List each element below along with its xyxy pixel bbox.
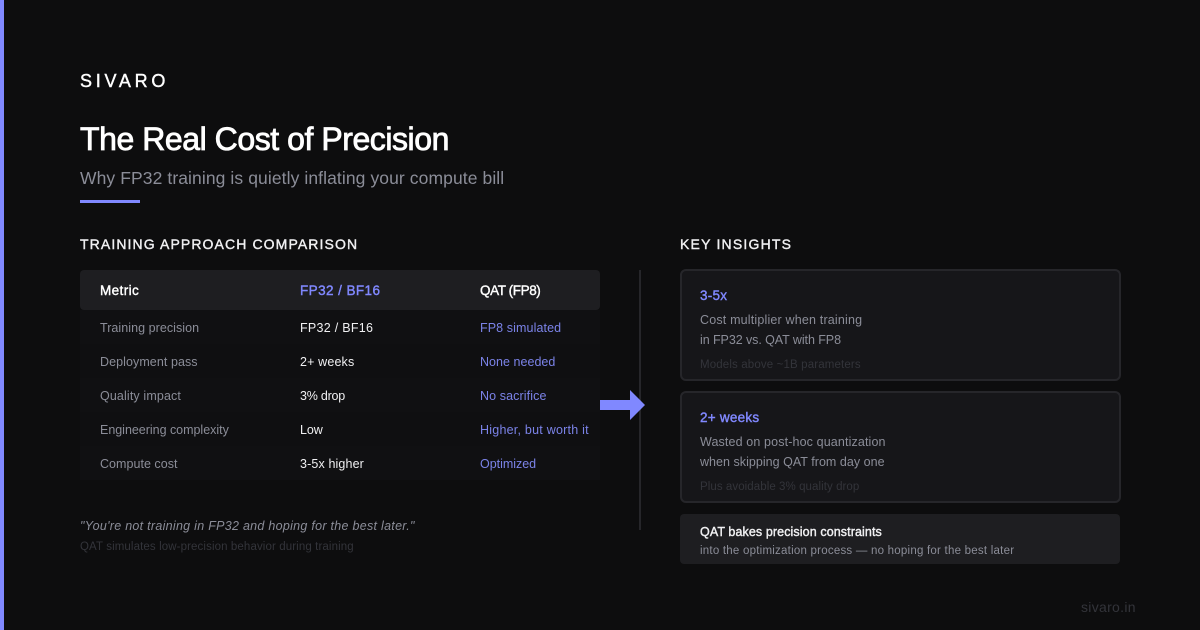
callout heading: QAT bakes precision constraints [700, 525, 882, 539]
row: deployment pass: Deployment pass [100, 355, 198, 369]
table header [80, 270, 600, 310]
quote: "You're not training in FP32 and hoping for the best later." [80, 518, 415, 532]
note: Models above ~1B parameters [700, 359, 861, 371]
header: metric: Metric [100, 283, 139, 298]
row: engineering complexity: Low [300, 423, 323, 437]
heading: comparison: TRAINING APPROACH COMPARISON [80, 236, 358, 252]
title: The Real Cost of Precision [80, 121, 449, 157]
brand logo: SIVARO [80, 71, 169, 91]
row: training precision: FP32 / BF16 [300, 321, 373, 335]
row: compute cost: Compute cost [100, 457, 177, 471]
row: compute cost: 3-5x higher [300, 457, 364, 471]
insight card: cost [680, 269, 1121, 381]
header: QAT: QAT (FP8) [480, 283, 540, 298]
row: quality impact [100, 389, 546, 403]
table body [80, 310, 600, 480]
row: engineering complexity: Higher, but worth it [480, 423, 589, 437]
callout [680, 514, 1120, 564]
row: deployment pass: None needed [480, 355, 555, 369]
row: compute cost [100, 457, 536, 471]
row: deployment pass: 2+ weeks [300, 355, 354, 369]
stat: 2+ weeks [700, 410, 759, 425]
note: Plus avoidable 3% quality drop [700, 481, 859, 493]
row: engineering complexity: Engineering complexity [100, 423, 229, 437]
row: quality impact: 3% drop [300, 389, 345, 403]
subtitle: Why FP32 training is quietly inflating your compute bill [80, 168, 504, 188]
arrow [600, 390, 645, 420]
title underline [80, 200, 140, 203]
row: quality impact: No sacrifice [480, 389, 546, 403]
heading: insights: KEY INSIGHTS [680, 236, 792, 252]
row: deployment pass [80, 344, 600, 378]
column divider [639, 270, 641, 530]
insight card: weeks [680, 391, 1121, 503]
header: FP32: FP32 / BF16 [300, 283, 380, 298]
insight card: weeks: when skipping QAT from day one [700, 455, 885, 469]
callout text: into the optimization process — no hoping for the best later [700, 545, 1014, 557]
insight card: cost: in FP32 vs. QAT with FP8 [700, 333, 841, 347]
row: engineering complexity [80, 412, 600, 446]
description: Wasted on post-hoc quantization [700, 435, 886, 449]
row: training precision [100, 321, 561, 335]
row: training precision: FP8 simulated [480, 321, 561, 335]
comparison table [80, 270, 600, 471]
footer url: sivaro.in [1081, 599, 1136, 615]
row: compute cost: Optimized [480, 457, 536, 471]
quote note: QAT simulates low-precision behavior during training [80, 541, 354, 553]
row: quality impact: Quality impact [100, 389, 181, 403]
description: Cost multiplier when training [700, 313, 862, 327]
accent bar [0, 0, 4, 630]
stat: 3-5x [700, 288, 727, 303]
row: training precision: Training precision [100, 321, 199, 335]
